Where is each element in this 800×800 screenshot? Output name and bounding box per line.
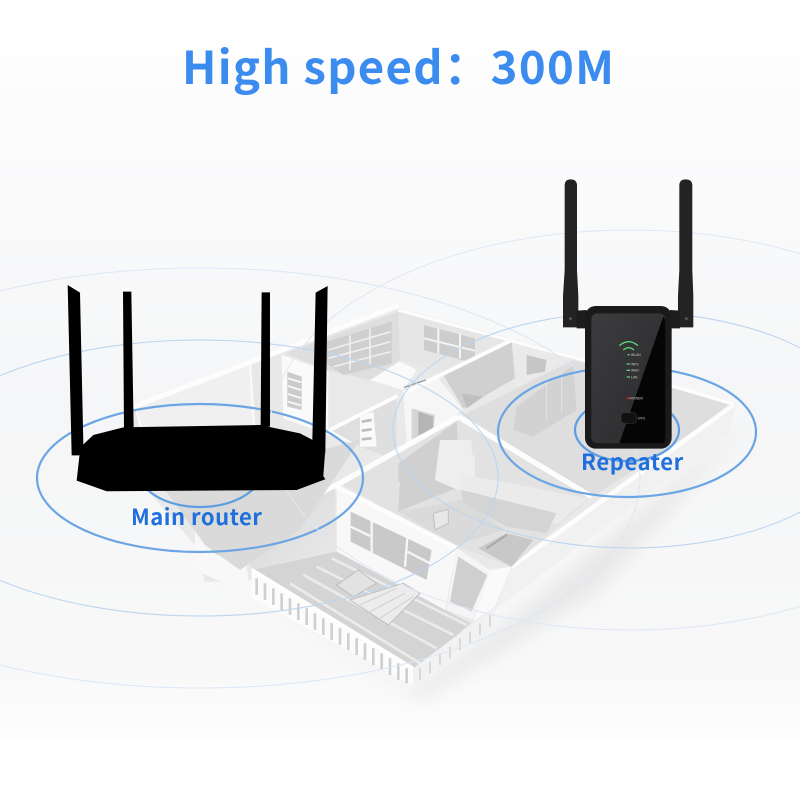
signal rings: repeater: [270, 230, 800, 630]
title: High speed：300M: [182, 32, 615, 98]
balcony railing: [252, 568, 495, 685]
icon: repeater: WAN: [631, 369, 639, 373]
label: main router: Main router: [131, 500, 262, 532]
left antenna: [563, 179, 578, 327]
label: repeater: Repeater: [581, 445, 684, 477]
LED labels: WLAN: [631, 353, 641, 357]
front face: [591, 313, 665, 443]
far left living room: [130, 306, 398, 570]
far right lower wall: [447, 548, 512, 622]
left lower room window: [195, 522, 250, 595]
right large room: [463, 356, 733, 567]
icon: main router: [68, 285, 328, 491]
icon: repeater: WPS: [631, 362, 639, 366]
outer right wall face: [495, 405, 735, 610]
upper right rooms with window: [398, 310, 570, 443]
ground shadow: [210, 420, 750, 700]
central corridor shelves: [328, 395, 397, 460]
bedroom floor with bed: [252, 552, 470, 677]
signal rings: main router: [0, 268, 640, 688]
glossy black diagonal: [619, 317, 665, 443]
router body: [77, 425, 325, 491]
wifi indicator: [619, 342, 638, 350]
icon: repeater: POWER: [630, 397, 643, 401]
back room with bookshelf: [282, 312, 417, 447]
WPS button: [621, 413, 636, 423]
antenna pivots: [570, 314, 686, 323]
icon: repeater: WPS: [638, 416, 646, 420]
icon: repeater: [563, 179, 693, 449]
router antennas: [68, 285, 328, 455]
kitchen and living room: [243, 417, 592, 567]
body: [585, 306, 672, 449]
house footprint: [130, 308, 735, 684]
hinges: [577, 310, 680, 328]
right antenna: [678, 179, 693, 327]
LEDs: [627, 355, 630, 377]
floor plan illustration: [130, 306, 750, 700]
bedroom window wall: [243, 487, 457, 612]
rooms drawn in zoom coordinates: [195, 310, 733, 685]
icon: repeater: LAN: [631, 375, 638, 379]
